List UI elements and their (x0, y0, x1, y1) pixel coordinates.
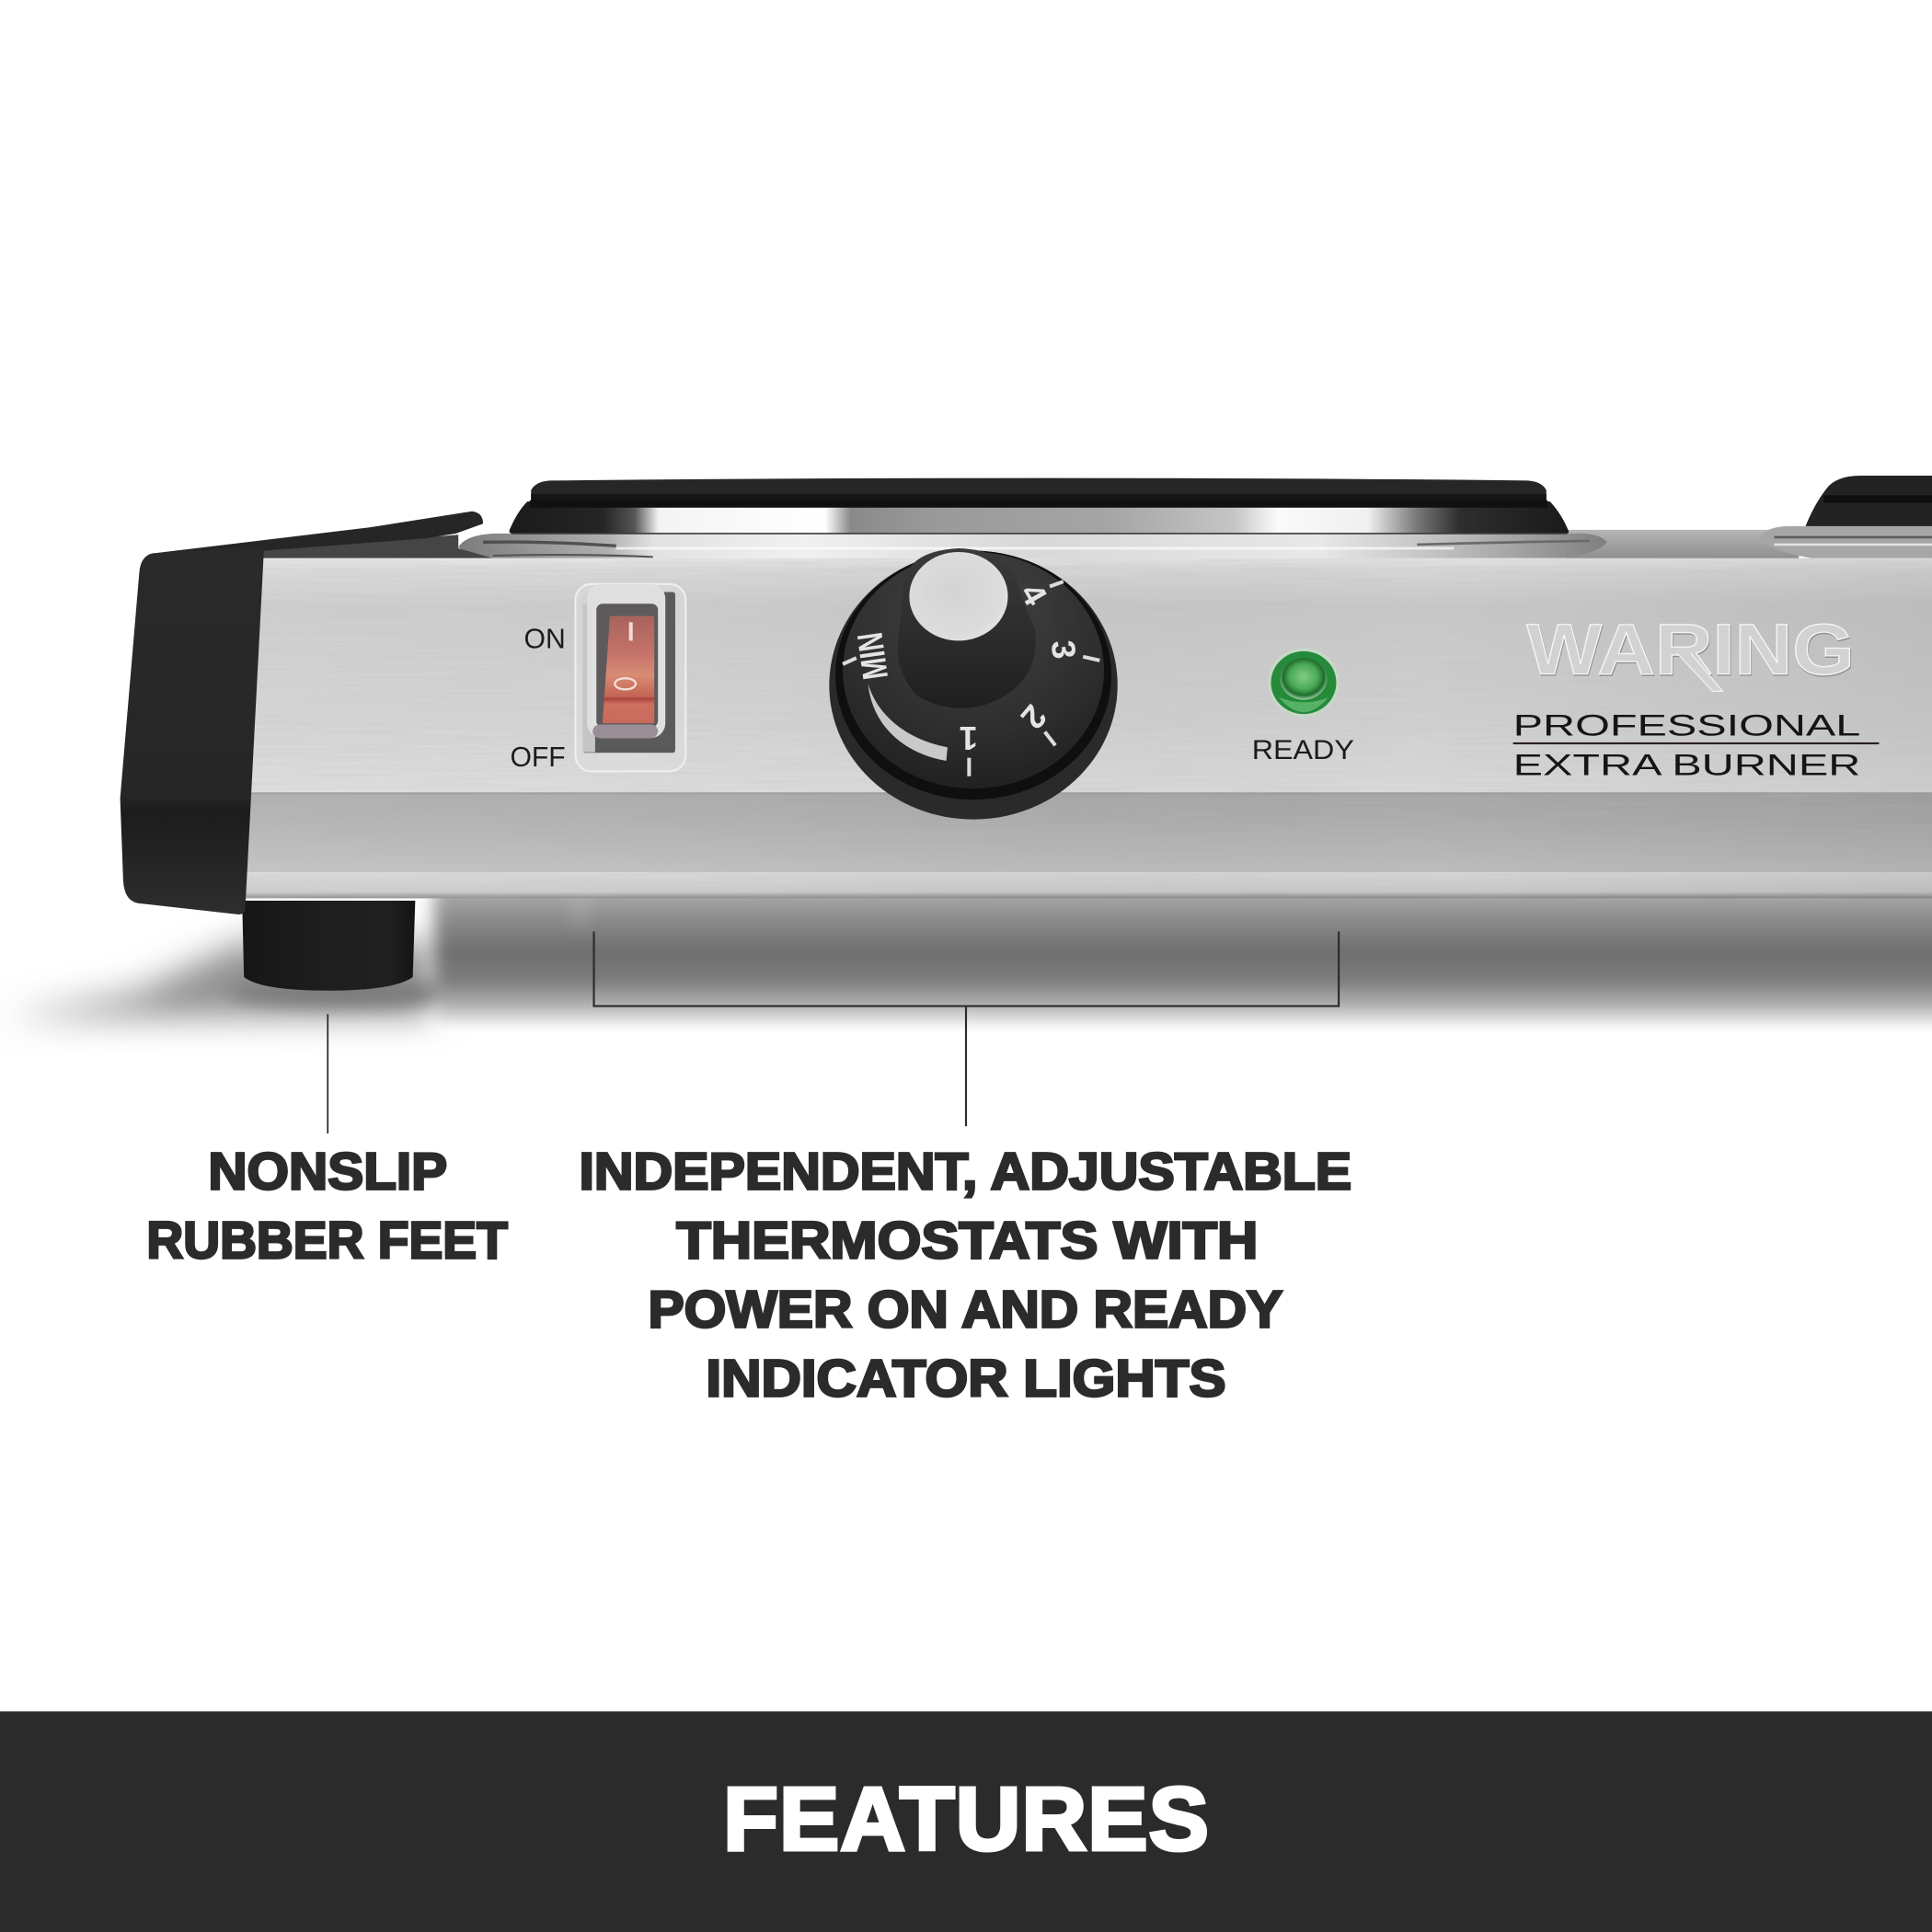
scale number 2: 2 (1014, 698, 1054, 736)
waring embossed logo: WARING (1526, 611, 1855, 690)
callout text: thermostats: INDEPENDENT, ADJUSTABLE (579, 1142, 1351, 1200)
thermostat knob (829, 548, 1118, 820)
rocker bottom shade (592, 725, 658, 738)
handle (898, 548, 1036, 708)
floor shadow (6, 893, 1932, 1031)
model label divider (1513, 742, 1879, 744)
callout text: thermostats: THERMOSTATS WITH (676, 1211, 1258, 1269)
dial base (829, 551, 1118, 820)
switch clear boot (575, 584, 685, 771)
steel housing (240, 558, 1932, 898)
switch clear dome (587, 584, 665, 738)
footer heading: FEATURES (723, 1768, 1209, 1869)
scale text min: MIN (850, 630, 896, 682)
burner right (1759, 476, 1932, 558)
rocker symbol off (615, 678, 636, 689)
callout text: nonslip rubber feet: NONSLIP (208, 1142, 447, 1200)
footer band (0, 1711, 1932, 1932)
lid wedge (154, 512, 493, 558)
callout text: nonslip rubber feet: RUBBER FEET (146, 1211, 508, 1269)
burner rim (458, 534, 1606, 558)
top surface strip (1565, 530, 1799, 559)
switch label off: OFF (510, 742, 566, 773)
waring embossed logo: WARING (1527, 612, 1855, 691)
burner lid (531, 478, 1547, 500)
model label professional: PROFESSIONAL (1513, 709, 1860, 742)
black end cap (121, 547, 264, 914)
scale arc (868, 684, 948, 761)
callout text: thermostats (579, 1142, 1351, 1407)
silver cap (909, 552, 1008, 640)
scale number 1: 1 (960, 719, 978, 757)
ready label: READY (1252, 735, 1354, 765)
callout bracket: thermostats (594, 931, 1339, 1126)
rocker frame (596, 604, 658, 727)
callout text: nonslip rubber feet (146, 1142, 508, 1269)
model label extra burner: EXTRA BURNER (1513, 748, 1860, 781)
scale ticks (843, 581, 1099, 776)
switch label on: ON (524, 624, 566, 654)
ready indicator light (1268, 648, 1340, 717)
scale number 4: 4 (1013, 577, 1055, 612)
red rocker (603, 616, 654, 723)
scale number 3: 3 (1044, 638, 1084, 661)
rubber foot (242, 901, 415, 991)
burner left (458, 478, 1606, 558)
callout text: thermostats: POWER ON AND READY (648, 1280, 1282, 1338)
switch dark housing (582, 592, 675, 753)
callout line: feet (327, 1014, 328, 1133)
dial face (843, 552, 1104, 788)
burner reflective collar (510, 501, 1569, 534)
rocker symbol on (629, 622, 633, 640)
callout text: thermostats: INDICATOR LIGHTS (706, 1349, 1226, 1407)
on off switch (575, 584, 685, 771)
